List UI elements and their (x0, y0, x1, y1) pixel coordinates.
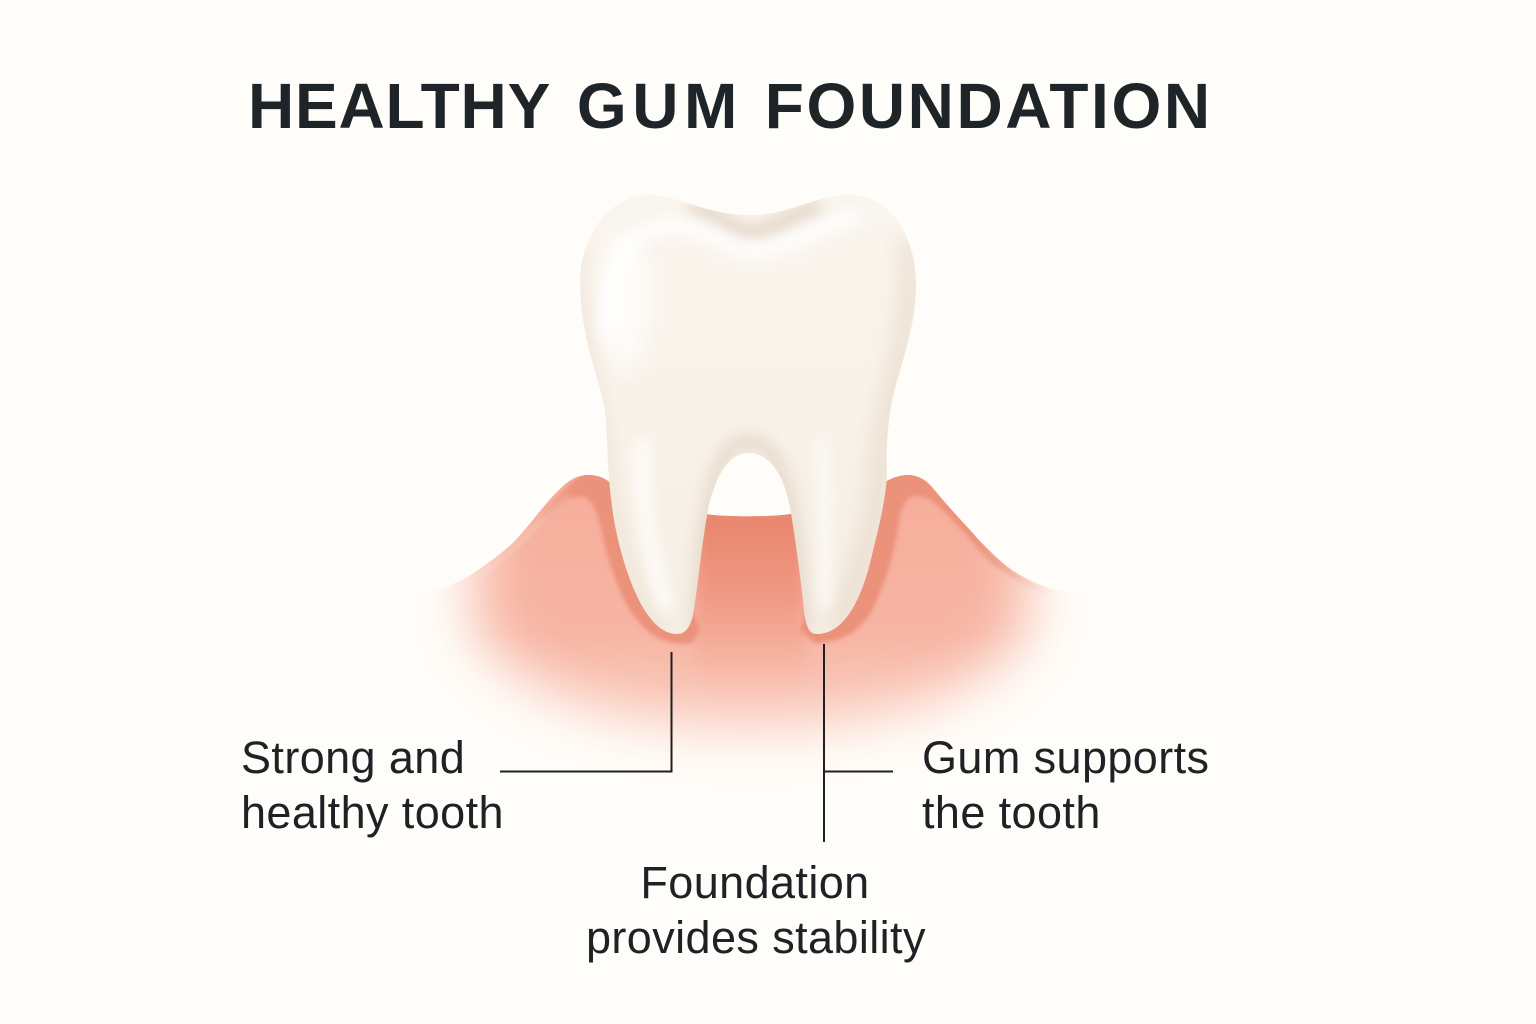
label: foundation (586, 857, 926, 963)
tooth: right root highlight (822, 440, 826, 610)
label: gum: the tooth (922, 787, 1101, 838)
gum (441, 475, 1062, 757)
tooth: left edge shade (580, 258, 656, 624)
label: foundation: provides stability (586, 912, 926, 963)
tooth: arch shade (698, 442, 804, 630)
label: gum: Gum supports (922, 732, 1209, 783)
label: tooth: Strong and (241, 732, 465, 783)
gum: left peak and socket rim (535, 470, 700, 644)
illustration: tooth in gum (441, 195, 1062, 842)
label: tooth: healthy tooth (241, 787, 504, 838)
tooth: crown highlight (635, 212, 856, 258)
title: HEALTHY GUM FOUNDATION (248, 70, 1213, 142)
gum: left highlight along peak (495, 493, 571, 564)
label: foundation: Foundation (640, 857, 870, 908)
tooth: left root highlight (642, 440, 668, 610)
tooth: right edge shade (838, 240, 911, 628)
tooth (570, 190, 930, 640)
gum: centre shading between roots (694, 514, 804, 662)
leader line: foundation and gum (824, 644, 893, 842)
label: tooth (241, 732, 504, 838)
leader line: tooth (500, 652, 672, 772)
gum: right peak and socket rim (800, 475, 1038, 644)
label: gum (922, 732, 1209, 838)
tooth: crown dip shade (690, 205, 820, 232)
